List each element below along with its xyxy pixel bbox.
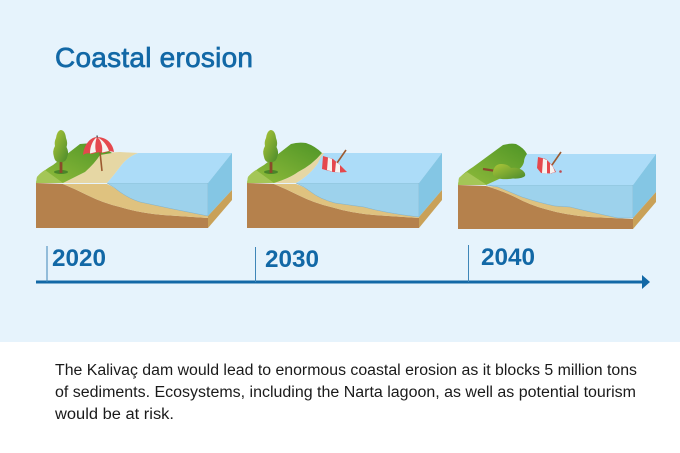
icon: fallen umbrella [537,152,562,174]
body text [54,362,637,423]
soil side face [419,190,442,228]
background panel [0,0,680,342]
water side face [419,153,442,217]
body text: of sediments. Ecosystems, including the Narta lagoon, as well as potential tourism [55,384,636,401]
water surface [107,153,232,183]
water side face [208,153,232,216]
tick: 2020 [46,246,48,282]
sand beach [274,153,324,183]
water front face [107,183,208,216]
body text: would be at risk. [54,406,174,423]
icon: fallen umbrella [322,150,347,172]
sand cross-section [274,184,419,218]
panel: 2020 beach block [36,130,232,228]
icon: fallen tree [483,164,525,179]
soil block [247,183,419,228]
tick: 2040 [468,245,469,282]
grass [36,143,112,183]
water side face [633,154,656,218]
label: 2030: 2030 [265,246,319,273]
sand beach [63,152,138,183]
grass [458,144,527,185]
grass [247,143,322,183]
timeline arrow [36,275,650,289]
sand cross-section [63,184,208,218]
icon: beach umbrella [83,136,114,171]
water surface [296,153,442,183]
soil block [36,183,208,228]
icon: tree [263,130,278,174]
water front face [486,185,633,218]
grass front edge [247,170,274,183]
water front face [296,183,419,217]
grass front edge [458,172,487,185]
panel: 2030 beach block [247,130,442,228]
soil block [458,185,633,229]
soil side face [208,190,232,228]
panel: 2040 beach block [458,144,656,229]
soil side face [633,192,656,229]
title: Coastal erosion [55,42,253,73]
grass front edge [36,170,63,183]
body text: The Kalivaç dam would lead to enormous coastal erosion as it blocks 5 million tons [55,362,637,379]
icon: tree [53,130,68,174]
tick: 2030 [255,247,256,282]
sand cross-section [486,186,633,219]
label: 2020: 2020 [52,245,106,272]
water surface [486,154,656,185]
label: 2040: 2040 [481,244,535,271]
